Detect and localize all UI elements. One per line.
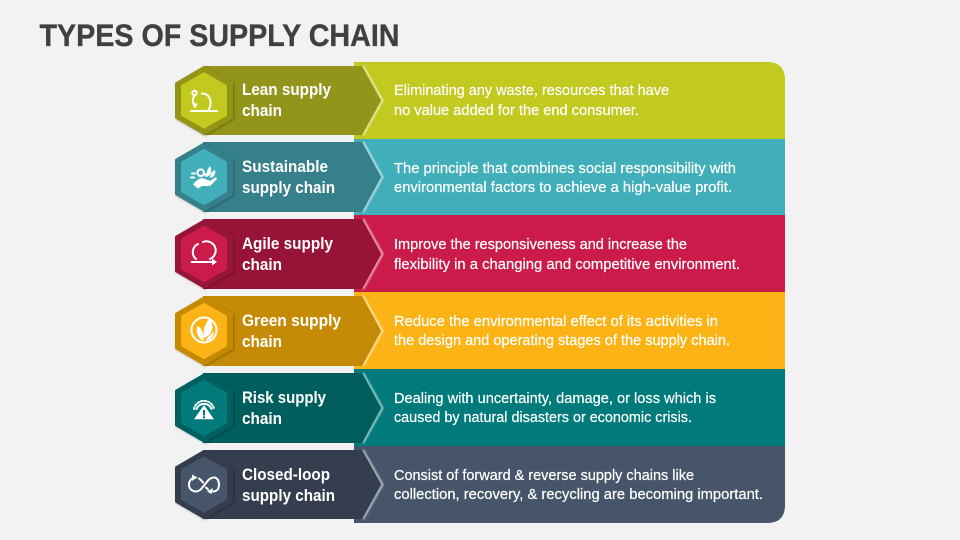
row: closed-loop supply chain xyxy=(176,446,785,523)
heading: lean supply chain: chain xyxy=(242,102,282,120)
heading: lean supply chain: Lean supply xyxy=(242,81,332,99)
icon: closed-loop hexagon with infinity arrows xyxy=(176,452,232,518)
arrow: agile label bar xyxy=(203,219,382,289)
heading: risk supply chain: chain xyxy=(242,410,282,428)
heading: sustainable supply chain: Sustainable xyxy=(242,158,328,176)
icon: risk hexagon with warning triangle xyxy=(176,375,232,441)
text: sustainable description: environmental factors to achieve a high-value profit. xyxy=(394,180,732,196)
text: closed-loop description: Consist of forward & reverse supply chains like xyxy=(394,468,694,484)
arrow: sustainable label bar xyxy=(203,142,382,212)
heading: sustainable supply chain: supply chain xyxy=(242,179,335,197)
arrow: closed-loop label bar xyxy=(203,450,382,519)
icon: agile hexagon with loop arrow xyxy=(176,221,232,287)
panel: lean description background xyxy=(354,62,785,139)
panel: sustainable description background xyxy=(354,139,785,215)
heading: agile supply chain: Agile supply xyxy=(242,235,334,253)
heading: green supply chain: chain xyxy=(242,333,282,351)
text: lean description: no value added for the end consumer. xyxy=(394,103,639,119)
text: lean description: Eliminating any waste, resources that have xyxy=(394,83,669,99)
icon: sustainable hexagon with hand and leaves xyxy=(176,144,232,210)
icon: green hexagon with leaves xyxy=(176,298,232,364)
arrow: risk label bar xyxy=(203,373,382,443)
row: agile supply chain xyxy=(176,215,785,292)
heading: closed-loop supply chain: Closed-loop xyxy=(242,466,330,484)
panel: closed-loop description background xyxy=(354,446,785,523)
text: agile description: Improve the responsiveness and increase the xyxy=(394,237,687,253)
row: risk supply chain xyxy=(176,369,785,446)
title: TYPES OF SUPPLY CHAIN xyxy=(40,17,400,53)
row: green supply chain xyxy=(176,292,785,369)
text: green description: the design and operating stages of the supply chain. xyxy=(394,333,730,349)
panel: green description background xyxy=(354,292,785,369)
text: green description: Reduce the environmental effect of its activities in xyxy=(394,314,718,330)
panel: risk description background xyxy=(354,369,785,446)
row: lean supply chain xyxy=(176,62,785,139)
text: sustainable description: The principle that combines social responsibility with xyxy=(394,161,736,177)
text: risk description: caused by natural disasters or economic crisis. xyxy=(394,410,692,426)
text: agile description: flexibility in a changing and competitive environment. xyxy=(394,257,740,273)
heading: green supply chain: Green supply xyxy=(242,312,342,330)
text: closed-loop description: collection, recovery, & recycling are becoming important. xyxy=(394,487,763,503)
icon: lean hexagon with loop xyxy=(176,68,232,134)
arrow: green label bar xyxy=(203,296,382,366)
heading: closed-loop supply chain: supply chain xyxy=(242,487,335,505)
heading: agile supply chain: chain xyxy=(242,256,282,274)
arrow: lean label bar xyxy=(203,66,382,135)
row: sustainable supply chain xyxy=(176,139,785,215)
text: risk description: Dealing with uncertainty, damage, or loss which is xyxy=(394,391,716,407)
panel: agile description background xyxy=(354,215,785,292)
heading: risk supply chain: Risk supply xyxy=(242,389,327,407)
